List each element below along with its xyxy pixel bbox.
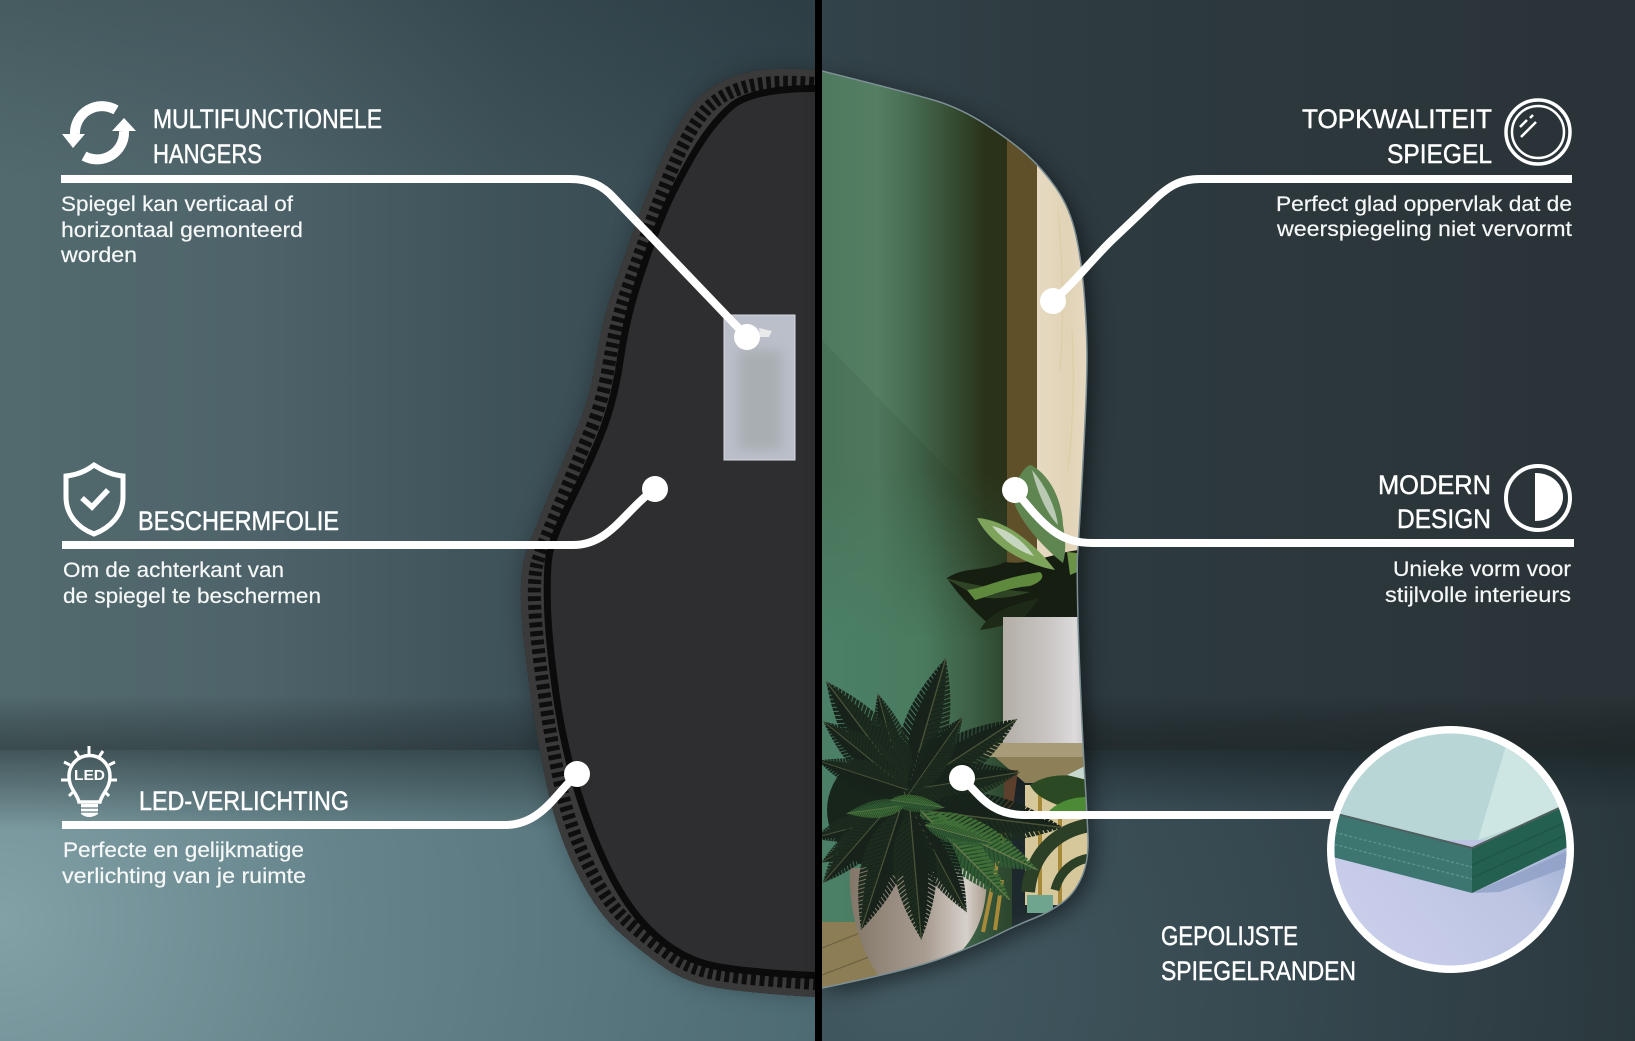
description: verlichting van je ruimte (62, 864, 306, 888)
description: horizontaal gemonteerd (61, 218, 303, 242)
icon: LED bulb: LED (74, 768, 105, 784)
center divider (815, 0, 822, 1041)
callout: topkwaliteit spiegel (1040, 100, 1572, 314)
callout: gepolijste spiegelranden (949, 720, 1590, 986)
background: right wall and floor (822, 0, 1635, 1041)
icon: refresh arrows (62, 106, 136, 159)
leader line to edge detail (949, 765, 1333, 815)
heading: SPIEGELRANDEN (1161, 956, 1356, 986)
description (60, 192, 303, 267)
white pot (1003, 617, 1082, 743)
description: worden (60, 243, 137, 267)
callout: modern design (1002, 466, 1574, 607)
heading: DESIGN (1397, 504, 1491, 534)
mirror back: frame with panel (521, 69, 815, 997)
background: left wall and floor (0, 0, 815, 1041)
heading: SPIEGEL (1387, 139, 1492, 169)
description: Perfecte en gelijkmatige (63, 838, 304, 862)
icon: shield (66, 465, 123, 534)
description: Spiegel kan verticaal of (61, 192, 293, 216)
description (1385, 557, 1571, 607)
callout: led-verlichting (61, 746, 590, 888)
heading (1161, 921, 1356, 986)
callout: beschermfolie (62, 465, 668, 608)
side table (980, 743, 1090, 932)
heading: MODERN (1378, 470, 1491, 500)
hanger plate (724, 315, 795, 460)
heading (1302, 104, 1492, 169)
leader line to mirror shape (1002, 477, 1574, 543)
heading: HANGERS (153, 139, 262, 169)
floor (822, 922, 878, 988)
mirror front with interior reflection (808, 60, 1097, 1000)
description (1276, 192, 1572, 241)
palm plant (808, 652, 1066, 941)
description (62, 838, 306, 888)
heading: GEPOLIJSTE (1161, 921, 1298, 951)
description: Perfect glad oppervlak dat de (1276, 192, 1572, 216)
heading (1378, 470, 1491, 534)
icon: mirror circle (1506, 100, 1570, 164)
description: weerspiegeling niet vervormt (1276, 217, 1572, 241)
description (63, 558, 321, 608)
icon: LED bulb (61, 746, 117, 817)
description: Om de achterkant van (63, 558, 284, 582)
heading: TOPKWALITEIT (1302, 104, 1492, 134)
heading (153, 104, 382, 169)
upper plant (945, 465, 1080, 630)
leader line to frame (62, 761, 590, 825)
leader line to mirror (1040, 179, 1572, 314)
callout: multifunctionele hangers (60, 104, 760, 350)
heading: LED-VERLICHTING (139, 786, 349, 816)
description: Unieke vorm voor (1393, 557, 1571, 581)
monstera leaves (1028, 765, 1090, 892)
leader line to hanger (61, 179, 760, 350)
large plant pot (850, 868, 987, 978)
description: de spiegel te beschermen (63, 584, 321, 608)
icon: half circle (1506, 466, 1570, 530)
heading: MULTIFUNCTIONELE (153, 104, 382, 134)
description: stijlvolle interieurs (1385, 583, 1571, 607)
edge detail circle (1327, 726, 1574, 973)
leader line to panel (62, 476, 668, 545)
heading: BESCHERMFOLIE (138, 506, 339, 536)
